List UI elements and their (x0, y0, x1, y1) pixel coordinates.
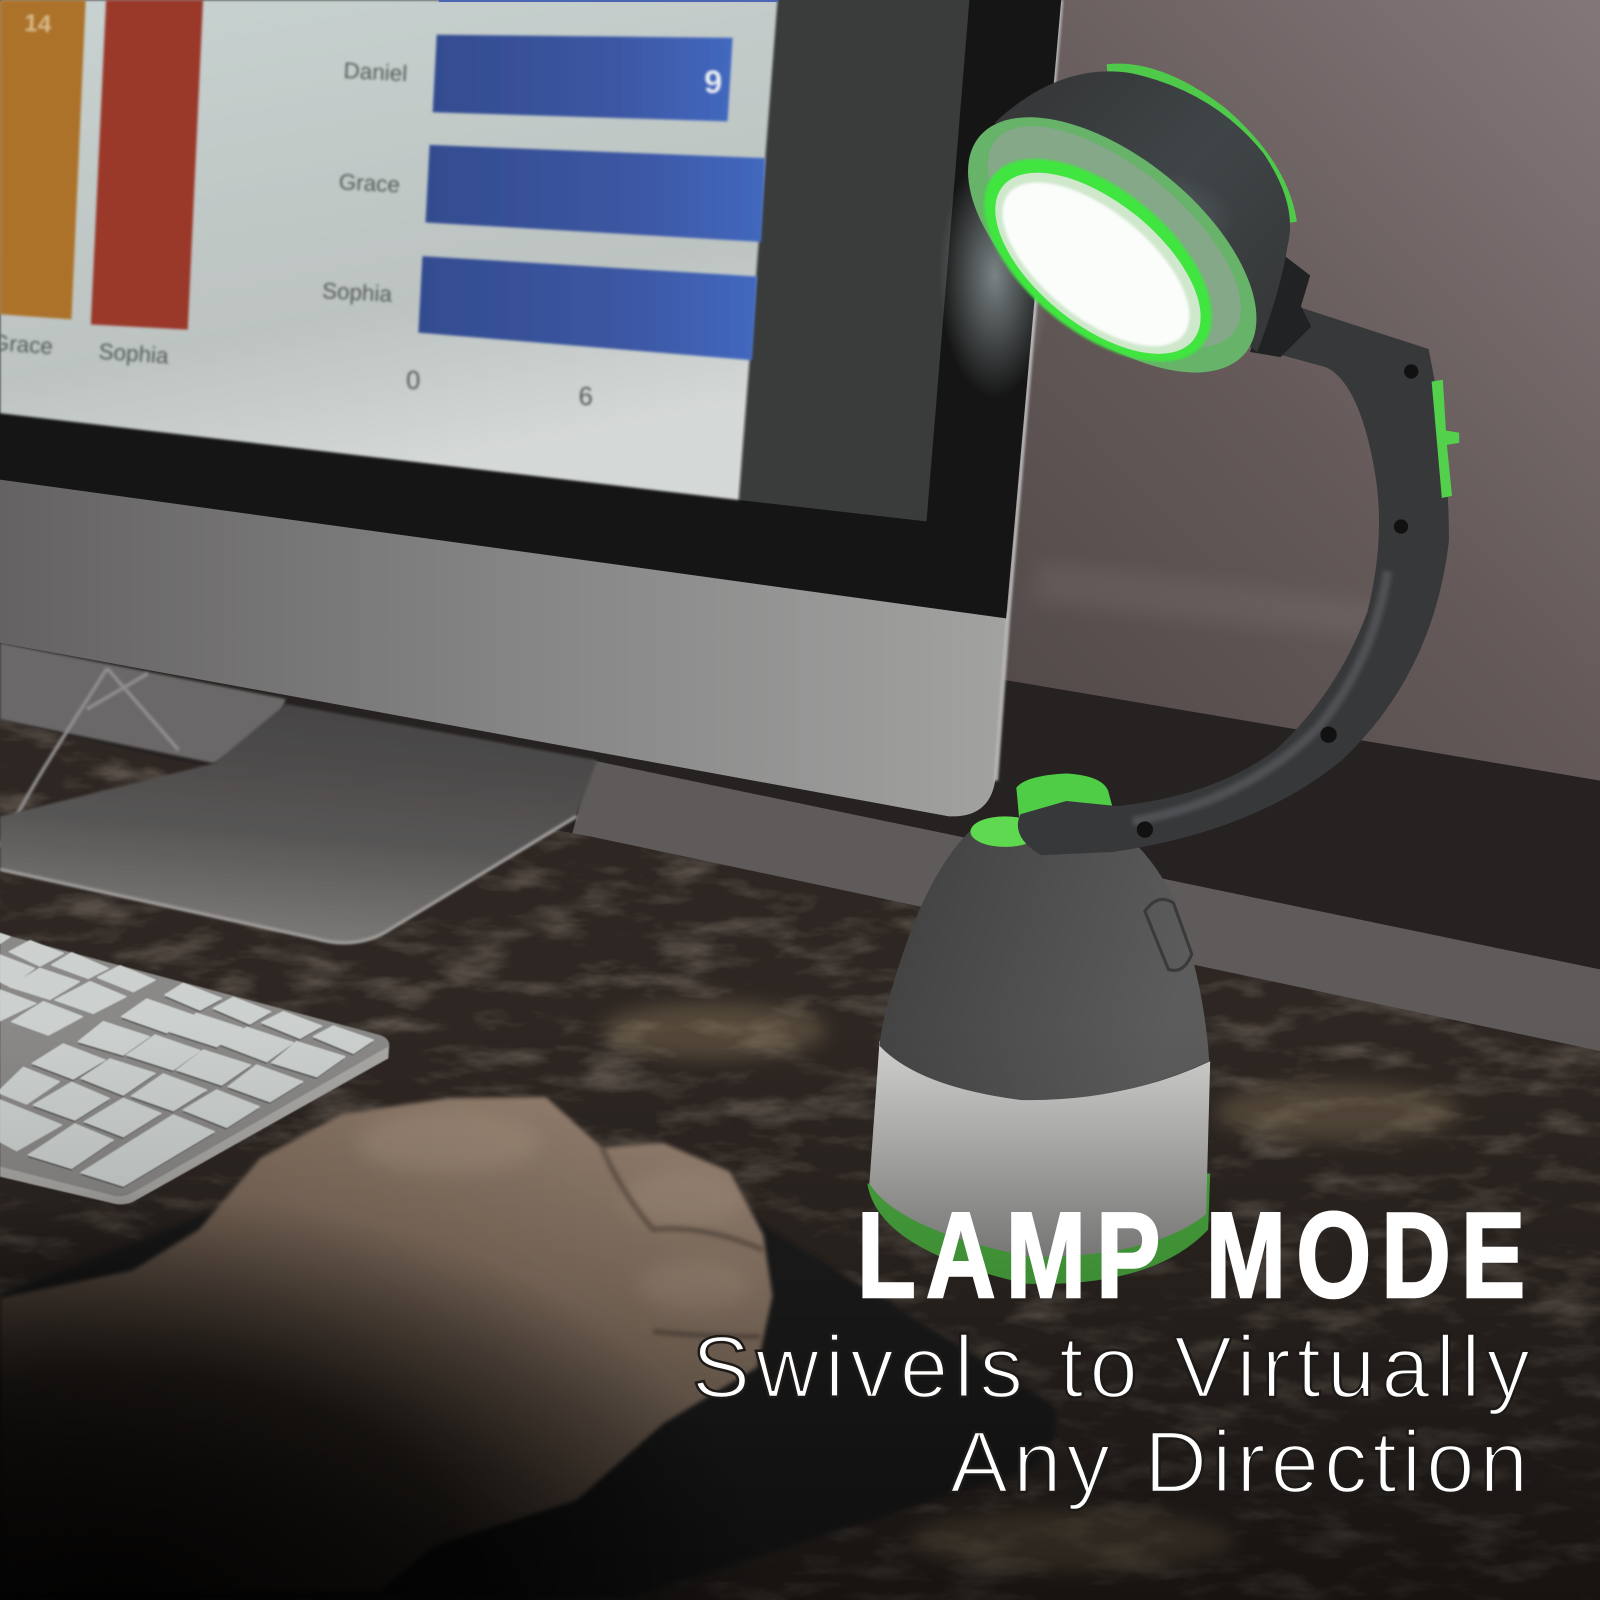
finger creases (602, 1148, 763, 1337)
screw 1 (1320, 727, 1337, 743)
blue bar: Grace (426, 145, 765, 242)
mouse pad (0, 1214, 1056, 1600)
keyboard front edge (0, 1047, 388, 1204)
subheading (692, 1319, 1530, 1511)
patch centre (602, 1002, 827, 1059)
label Daniel: Daniel (343, 58, 408, 86)
patch right (1214, 1084, 1459, 1141)
green cap (970, 816, 1040, 847)
head glow on body (1092, 173, 1235, 265)
stand rear neck (0, 643, 286, 763)
arm highlight (1133, 571, 1388, 821)
screw 2 (1137, 821, 1153, 838)
monitor cable (0, 668, 179, 847)
keys (0, 933, 373, 1186)
lamp base (867, 773, 1210, 1284)
inner pale ring (964, 139, 1232, 388)
monitor chin (0, 469, 1008, 816)
lamp side button (1145, 899, 1192, 970)
outer face rim (924, 69, 1301, 421)
screw 3 (1394, 519, 1408, 534)
wall light band (1031, 561, 1378, 638)
lamp base green foot (867, 1173, 1210, 1284)
monitor bezel (0, 0, 1061, 618)
screen white area (0, 0, 778, 500)
green knob (1016, 773, 1112, 832)
blue bar: Daniel (433, 35, 733, 121)
caption (692, 1187, 1530, 1511)
label 14: 14 (23, 10, 52, 38)
monitor stand lower edge (0, 816, 577, 943)
left dark vignette (0, 1122, 816, 1600)
chart labels (0, 10, 722, 411)
value 9: 9 (704, 63, 722, 100)
axis 0: 0 (406, 367, 420, 395)
keyboard plate (0, 933, 389, 1204)
bottom dark gradient (0, 1020, 1600, 1600)
desk surface (0, 719, 1600, 1600)
heading: LAMP MODE: LAMP MODE (857, 1187, 1525, 1324)
blue bar: Sophia (418, 256, 757, 360)
arm screws (1137, 364, 1418, 838)
keyboard (0, 933, 389, 1204)
knuckle highlights (357, 1112, 750, 1311)
green rim on back of head (1107, 69, 1292, 222)
lamp diffuser (869, 1041, 1210, 1257)
dark side of screen (739, 0, 969, 521)
line: Swivels to Virtually: Swivels to Virtually (692, 1319, 1530, 1416)
key shadows (28, 986, 373, 1188)
label Sophia right: Sophia (322, 278, 393, 307)
label Grace right: Grace (338, 169, 401, 197)
lamp head (924, 69, 1301, 421)
monitor stand (0, 704, 597, 943)
dark head body (995, 71, 1290, 352)
line: Any Direction: Any Direction (950, 1414, 1528, 1511)
lamp dark body (880, 832, 1209, 1100)
monitor (0, 0, 1061, 816)
patch lower (908, 1510, 1235, 1571)
background band behind the desk (0, 510, 1600, 1061)
hand and forearm (0, 1097, 772, 1592)
head joint (1250, 255, 1311, 357)
flexible arm (1018, 301, 1449, 855)
axis 6: 6 (579, 383, 593, 411)
label Sophia left: Sophia (98, 339, 170, 369)
screw 4 (1404, 364, 1418, 379)
top blue bar edge (439, 0, 779, 2)
pale rim upper band (952, 86, 1277, 387)
knuckle 3 (638, 1260, 750, 1311)
knuckle 1 (357, 1112, 541, 1173)
orange column (0, 0, 86, 319)
glowing green ring (948, 120, 1248, 400)
white lens (975, 152, 1217, 376)
green slider on arm (1432, 380, 1459, 498)
desk tan patches (602, 1002, 1459, 1571)
wall (980, 0, 1600, 816)
desk mottled texture (0, 719, 1600, 1600)
red column (91, 0, 203, 330)
monitor edge highlight (996, 0, 1061, 781)
knuckle 2 (622, 1170, 745, 1228)
lighter back edge of desk (571, 760, 1600, 1061)
head glow on screen (939, 153, 1051, 398)
